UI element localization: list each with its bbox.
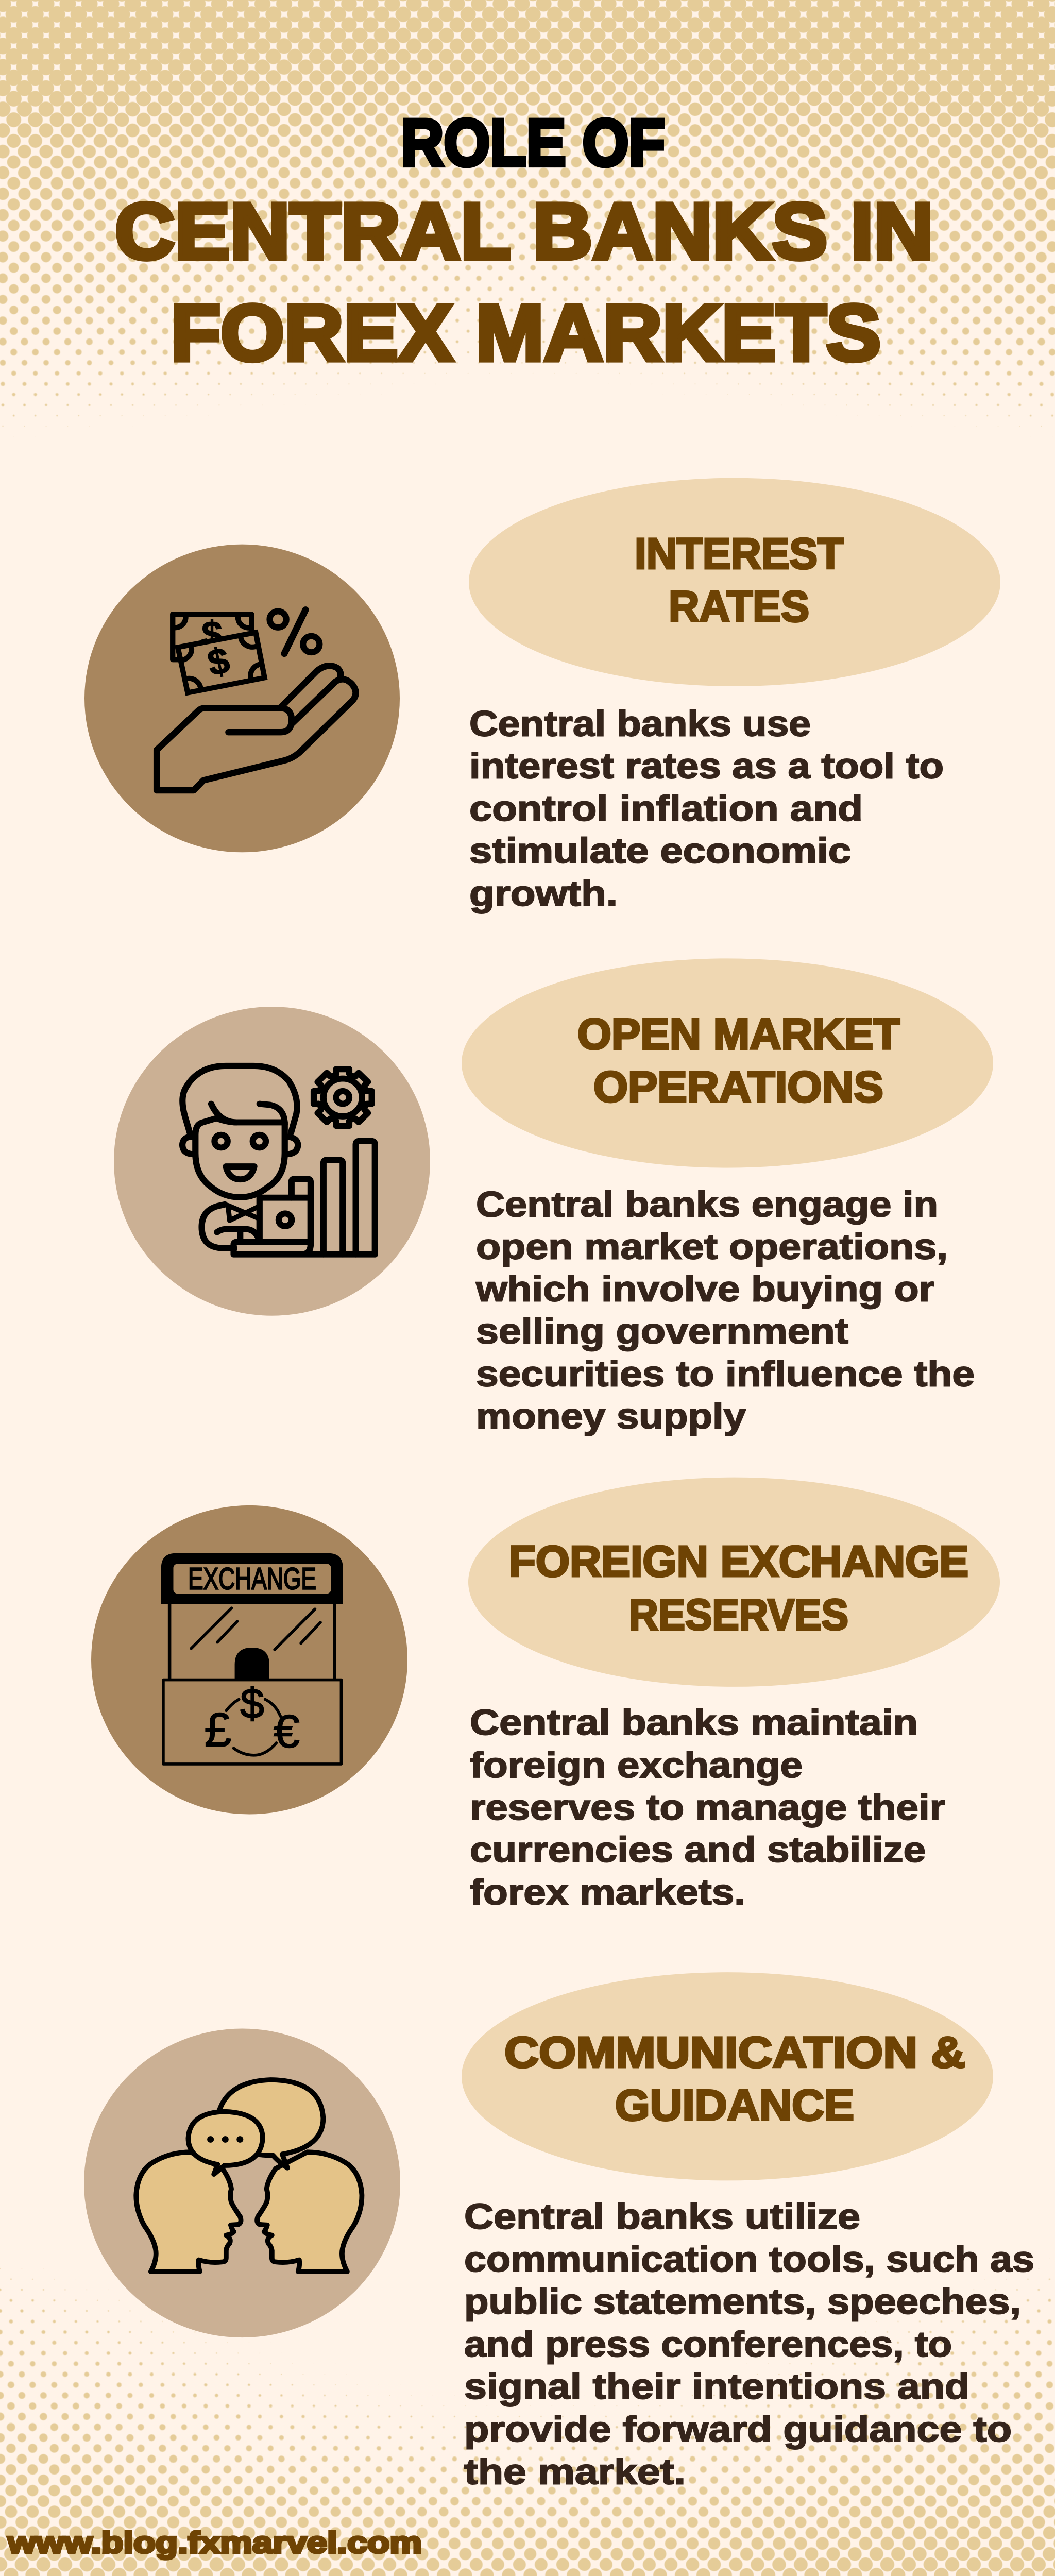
- text block: communication and guidance: communication tools, such as: [464, 2239, 1034, 2279]
- icon: banker with gear and chart: [114, 1007, 430, 1316]
- heading: communication and guidance: [462, 1972, 993, 2180]
- heading: interest rates: [469, 478, 1000, 686]
- text block: open market operations: securities to influence the: [476, 1353, 975, 1394]
- heading: open market operations: [462, 958, 993, 1168]
- text block: interest rates: Central banks use: [469, 703, 811, 744]
- text block: open market operations: selling government: [476, 1311, 848, 1351]
- text block: foreign exchange reserves: currencies and stabilize: [470, 1829, 926, 1870]
- text block: open market operations: [475, 1184, 975, 1436]
- text block: foreign exchange reserves: forex markets.: [470, 1872, 745, 1912]
- heading: interest rates: INTEREST: [635, 530, 843, 578]
- text block: communication and guidance: the market.: [464, 2451, 686, 2492]
- panel: open market operations: [114, 958, 993, 1436]
- text block: interest rates: [469, 703, 944, 913]
- text block: open market operations: Central banks engage in: [476, 1184, 938, 1224]
- heading: communication and guidance: COMMUNICATION &: [504, 2029, 965, 2077]
- text block: interest rates: interest rates as a tool to: [469, 746, 944, 786]
- icon: exchange booth: EXCHANGE: [188, 1561, 316, 1596]
- icon: two heads talking: [84, 2029, 400, 2337]
- heading: foreign exchange reserves: [468, 1478, 1000, 1687]
- icon: exchange booth: £: [205, 1703, 231, 1756]
- icon: exchange booth: €: [274, 1706, 300, 1757]
- text block: foreign exchange reserves: reserves to manage their: [470, 1787, 945, 1827]
- text block: interest rates: growth.: [469, 873, 618, 913]
- icon: exchange booth: $: [240, 1680, 264, 1727]
- title: FOREX MARKETS: [171, 289, 881, 378]
- text block: communication and guidance: and press conferences, to: [464, 2324, 952, 2364]
- text block: foreign exchange reserves: foreign exchange: [470, 1745, 803, 1785]
- heading: communication and guidance: GUIDANCE: [615, 2081, 854, 2130]
- text block: open market operations: open market operations,: [476, 1226, 948, 1266]
- text block: open market operations: which involve buying or: [475, 1268, 934, 1309]
- footer url: www.blog.fxmarvel.com: [7, 2526, 422, 2560]
- text block: foreign exchange reserves: [470, 1702, 945, 1912]
- text block: interest rates: stimulate economic: [469, 831, 851, 871]
- text block: communication and guidance: signal their intentions and: [464, 2366, 969, 2406]
- heading: interest rates: RATES: [669, 583, 809, 631]
- text block: communication and guidance: public statements, speeches,: [464, 2281, 1021, 2321]
- panel: interest rates: [84, 478, 1000, 913]
- icon: exchange booth: [91, 1505, 407, 1814]
- title: ROLE OF: [401, 106, 665, 180]
- heading: open market operations: OPERATIONS: [593, 1063, 883, 1111]
- heading: foreign exchange reserves: FOREIGN EXCHANGE: [509, 1537, 968, 1586]
- title: CENTRAL BANKS IN: [115, 188, 933, 276]
- panel: foreign exchange reserves: [91, 1478, 1000, 1912]
- icon: hand with money and percent: [84, 545, 400, 852]
- text block: communication and guidance: Central banks utilize: [464, 2196, 860, 2236]
- title: [115, 106, 933, 378]
- text block: interest rates: control inflation and: [469, 788, 863, 828]
- text block: open market operations: money supply: [476, 1396, 746, 1436]
- text block: communication and guidance: provide forward guidance to: [464, 2409, 1012, 2449]
- heading: open market operations: OPEN MARKET: [577, 1010, 900, 1059]
- heading: foreign exchange reserves: RESERVES: [629, 1591, 848, 1639]
- icon: hand with money and percent: $: [201, 614, 223, 655]
- text block: communication and guidance: [464, 2196, 1034, 2492]
- panel: communication and guidance: [84, 1972, 1034, 2492]
- text block: foreign exchange reserves: Central banks maintain: [470, 1702, 918, 1742]
- icon: hand with money and percent: $: [204, 640, 233, 684]
